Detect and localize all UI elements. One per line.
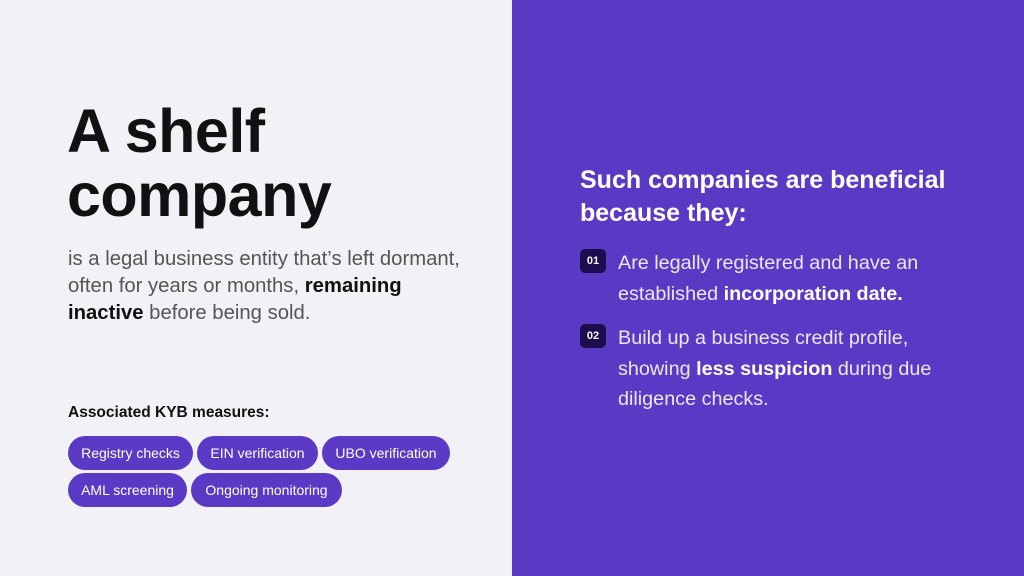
badge 01 (580, 249, 606, 273)
badge 02 (580, 324, 606, 348)
pill: registry checks (68, 436, 193, 470)
pill: registry checks: Registry checks (81, 445, 180, 461)
panel: left (0, 0, 512, 576)
title: company (67, 161, 331, 229)
pill: EIN: EIN verification (210, 445, 305, 461)
item 2: Build up a business credit profile, showing less suspicion during due diligence checks. (618, 327, 931, 410)
badge 02: 02 (587, 330, 599, 342)
KYB heading: Associated KYB measures: (68, 404, 270, 421)
right heading: because they: (580, 199, 747, 227)
badge 01: 01 (587, 255, 599, 267)
pill: EIN (197, 436, 318, 470)
title (67, 97, 332, 229)
right heading (580, 166, 945, 227)
item 1: Are legally registered and have an established incorporation date. (618, 252, 918, 304)
pill: monitoring: Ongoing monitoring (205, 482, 328, 498)
pill: monitoring (191, 473, 342, 507)
right heading: Such companies are beneficial (580, 166, 945, 194)
pill: AML: AML screening (81, 482, 174, 498)
pill: UBO (322, 436, 450, 470)
pill: AML (68, 473, 187, 507)
title: A shelf (67, 97, 265, 165)
pill: UBO: UBO verification (335, 445, 437, 461)
panel: right (512, 0, 1024, 576)
definition text: is a legal business entity that’s left dormant, often for years or months, remaining inactive before being sold. (68, 248, 460, 324)
